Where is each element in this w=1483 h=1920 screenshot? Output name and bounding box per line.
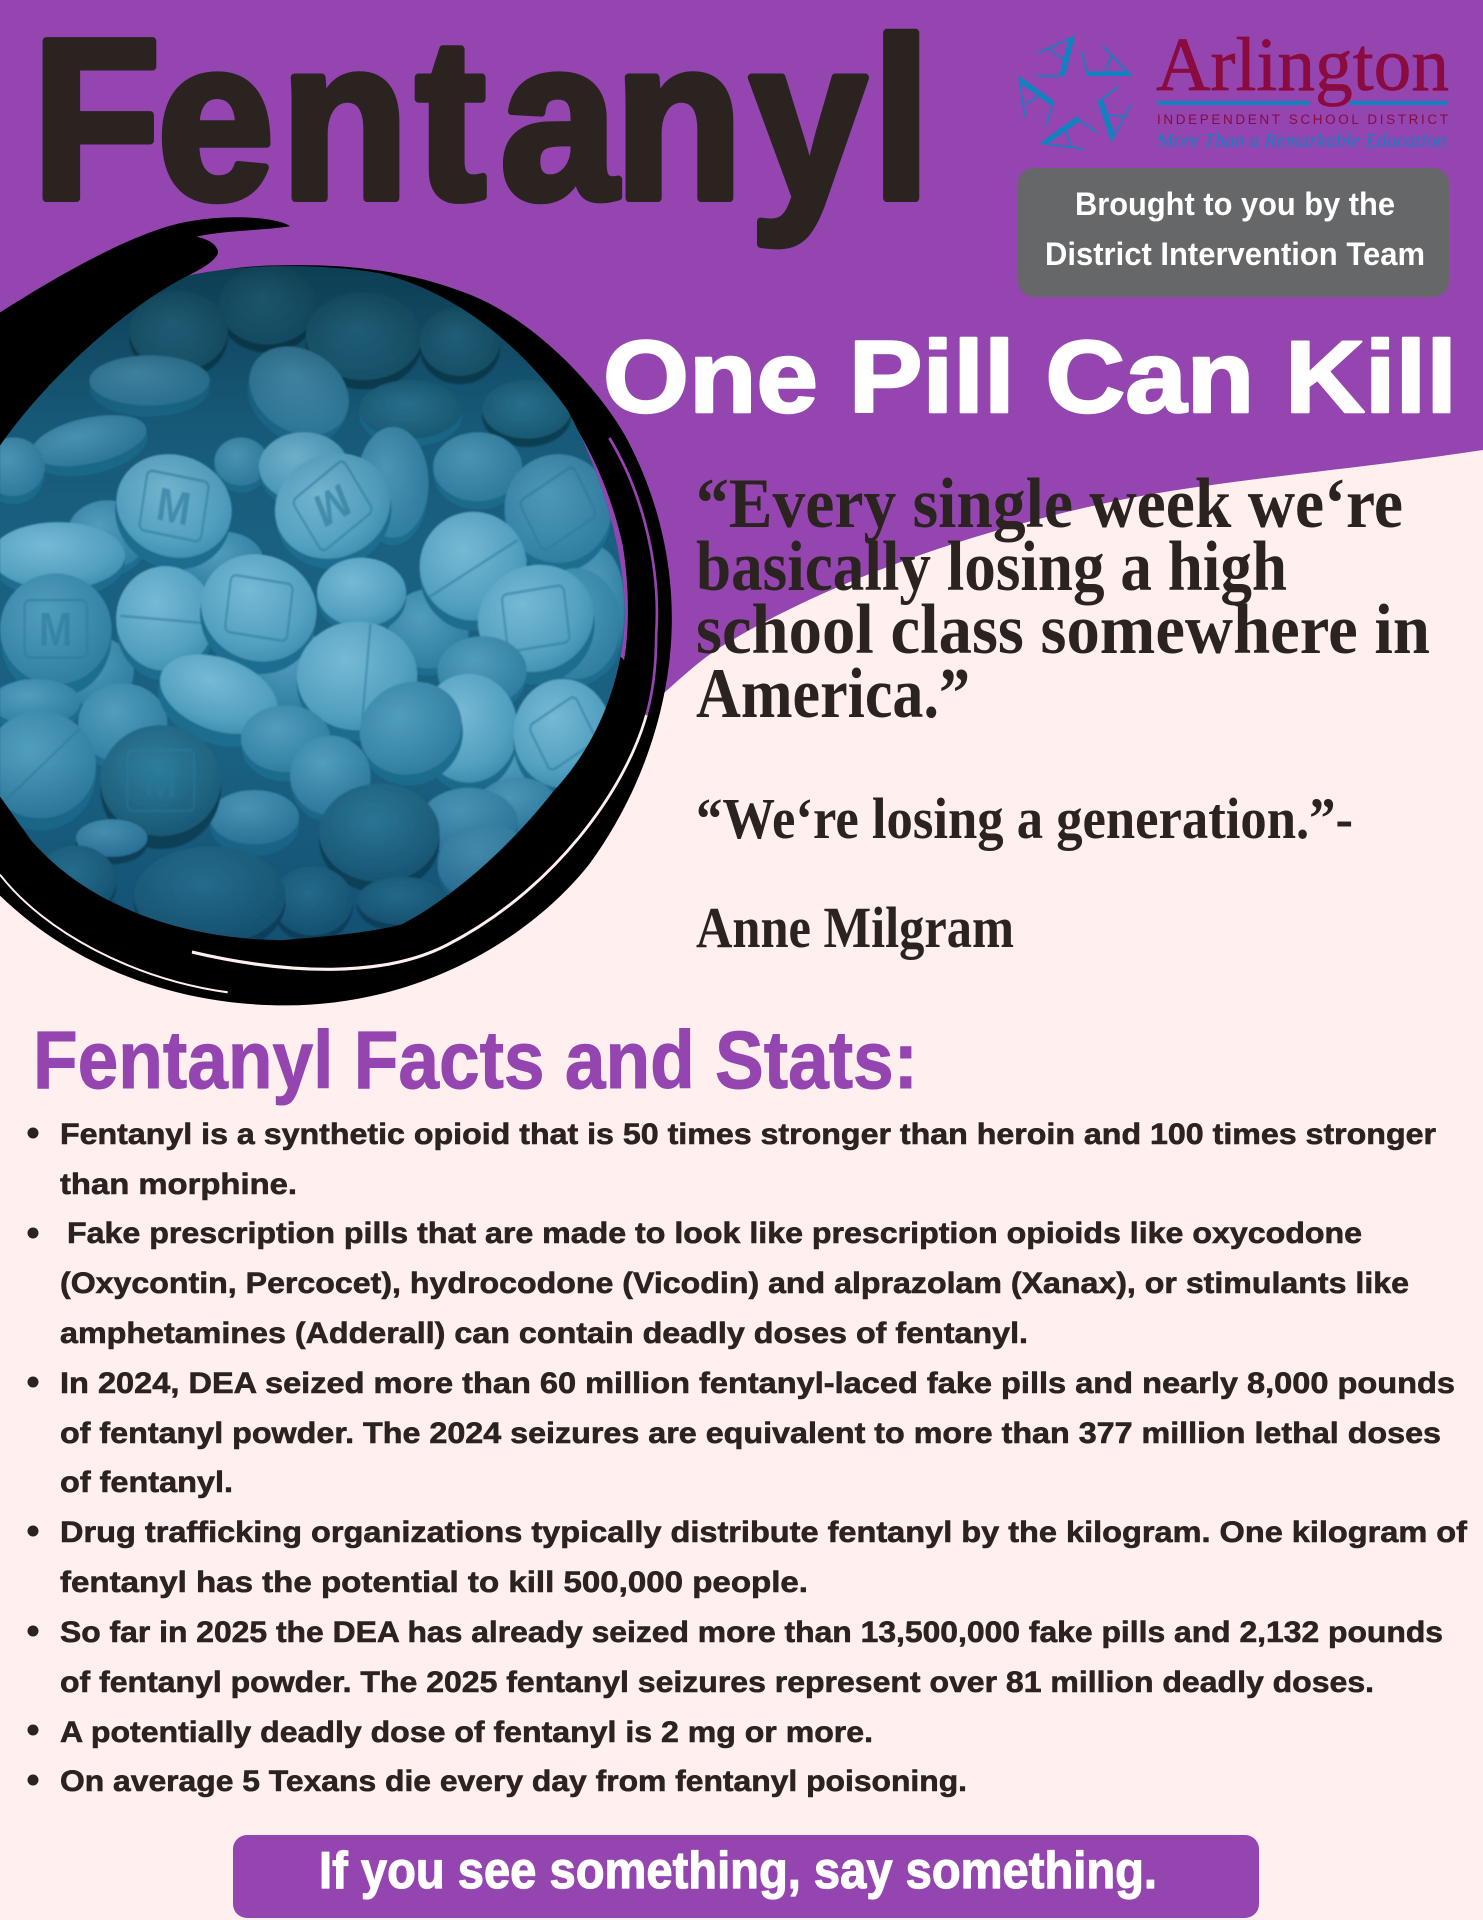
fact 5: So far in 2025 the DEA has already seized more than 13,500,000 fake pills and 2,132 pounds xyxy=(60,1616,1443,1649)
logo subtitle: INDEPENDENT SCHOOL DISTRICT xyxy=(1157,112,1448,127)
call to action banner xyxy=(233,1835,1259,1918)
quote line 3: school class somewhere in xyxy=(696,591,1430,669)
fact 5 xyxy=(60,1616,1443,1699)
pills photo xyxy=(0,200,670,984)
pills photo: M xyxy=(153,478,194,536)
lower left slit xyxy=(0,875,228,992)
credit line 2: District Intervention Team xyxy=(1045,236,1425,272)
district logo xyxy=(1019,23,1449,152)
logo tagline: More Than a Remarkable Education xyxy=(1156,130,1446,152)
pills photo: M xyxy=(39,604,72,656)
quote line 4: America.” xyxy=(696,655,970,733)
fact 2: (Oxycontin, Percocet), hydrocodone (Vicodin) and alprazolam (Xanax), or stimulants like xyxy=(60,1267,1409,1300)
pills photo: M xyxy=(308,473,357,537)
main title: Fentanyl xyxy=(32,0,930,247)
headline: One Pill Can Kill xyxy=(603,320,1457,434)
black brush ring xyxy=(0,217,672,1005)
logo rules xyxy=(1157,101,1448,105)
fact 2: Fake prescription pills that are made to look like prescription opioids like oxycodone xyxy=(67,1217,1362,1250)
pills photo: M xyxy=(144,755,177,808)
purple crescent xyxy=(464,318,628,660)
quote line 2: basically losing a high xyxy=(696,528,1287,606)
fact 4: Drug trafficking organizations typically distribute fentanyl by the kilogram. One kilogram of xyxy=(60,1516,1467,1549)
second quote: “We‘re losing a generation.”- xyxy=(696,786,1353,851)
photo of blue pills in brush ring xyxy=(0,200,672,1005)
fact 4 xyxy=(60,1516,1467,1599)
banner text: If you see something, say something. xyxy=(319,1842,1157,1900)
fact 3: of fentanyl powder. The 2024 seizures are equivalent to more than 377 million lethal doses xyxy=(60,1417,1441,1450)
logo wordmark: Arlington xyxy=(1156,23,1449,107)
purple slit xyxy=(609,438,657,715)
attribution: Anne Milgram xyxy=(696,895,1014,960)
fact 4: fentanyl has the potential to kill 500,000 people. xyxy=(60,1566,808,1599)
fact 1 xyxy=(60,1118,1437,1201)
fact 1: Fentanyl is a synthetic opioid that is 50 times stronger than heroin and 100 times stronger xyxy=(60,1118,1437,1151)
fact 3 xyxy=(60,1367,1455,1499)
purple header wave xyxy=(0,0,1483,760)
fact 2: amphetamines (Adderall) can contain deadly doses of fentanyl. xyxy=(60,1317,1028,1350)
fact 3: In 2024, DEA seized more than 60 million fentanyl-laced fake pills and nearly 8,000 pounds xyxy=(60,1367,1455,1400)
fact 2 xyxy=(60,1217,1409,1350)
icon: five part star xyxy=(1019,36,1132,149)
cream slit xyxy=(192,715,646,969)
fact 1: than morphine. xyxy=(60,1168,297,1201)
quote line 1: “Every single week we‘re xyxy=(696,465,1403,543)
fact 3: of fentanyl. xyxy=(60,1466,233,1499)
facts heading: Fentanyl Facts and Stats: xyxy=(33,1015,918,1106)
brush stroke over photo bottom xyxy=(230,896,473,958)
quote xyxy=(696,465,1430,960)
fact 6: A potentially deadly dose of fentanyl is 2 mg or more. xyxy=(60,1716,873,1749)
fact 7: On average 5 Texans die every day from fentanyl poisoning. xyxy=(60,1765,967,1798)
credit box xyxy=(1018,168,1449,297)
fact 5: of fentanyl powder. The 2025 fentanyl seizures represent over 81 million deadly doses. xyxy=(60,1666,1374,1699)
facts list xyxy=(28,1118,1467,1798)
bullet markers xyxy=(28,1128,38,1786)
credit line 1: Brought to you by the xyxy=(1075,186,1395,222)
